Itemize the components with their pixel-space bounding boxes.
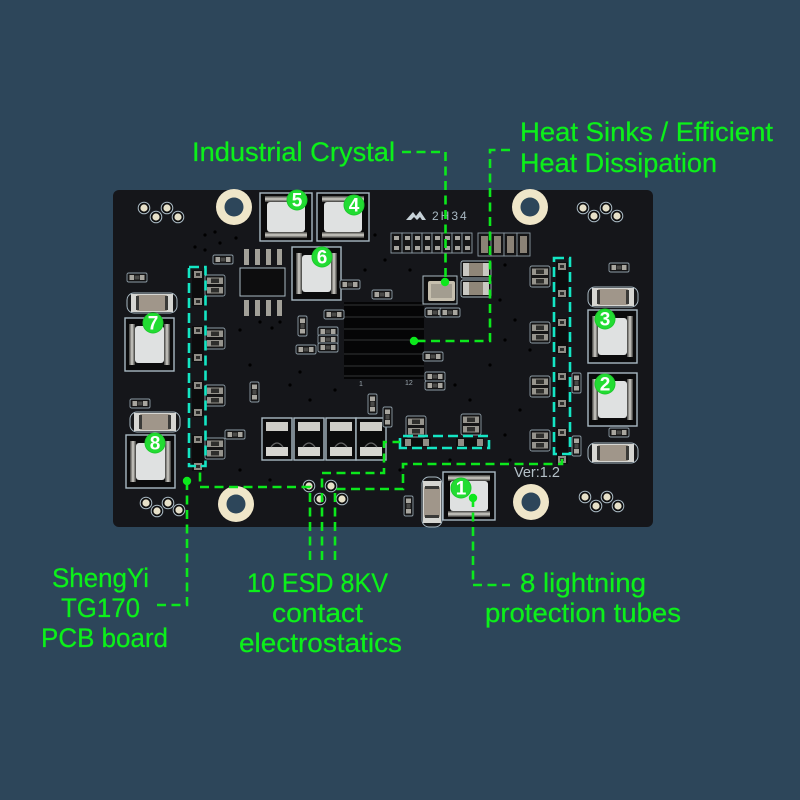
- number badge 5: [287, 190, 307, 212]
- label: ESD: 10 ESD 8KV: [247, 568, 388, 598]
- TVS diodes (cyan regions): [192, 262, 568, 471]
- label: heat sinks: Heat Dissipation: [520, 148, 717, 178]
- label: heat sinks: [520, 117, 774, 178]
- cyan highlight: right TVS group: [554, 258, 570, 454]
- number badge 2: [595, 374, 615, 396]
- heat sink pin numbers: 1: [359, 381, 363, 388]
- mounting holes: [216, 189, 549, 522]
- cyan highlight: left TVS group: [189, 267, 206, 466]
- label: heat sinks: Heat Sinks / Efficient: [520, 117, 774, 147]
- number badge 1: 1: [456, 478, 467, 500]
- PCB board: [113, 189, 653, 527]
- number badge 7: 7: [148, 314, 158, 334]
- label: ESD: [239, 568, 402, 658]
- corner pads: [138, 202, 624, 517]
- leader: ESD left branch: [200, 467, 310, 560]
- heat sink: [344, 302, 424, 379]
- leader: ESD right branch: [335, 455, 562, 560]
- number badge 5: 5: [292, 190, 303, 212]
- IC chip: [240, 249, 285, 316]
- label: PCB board: [41, 563, 168, 653]
- number badge 7: [143, 313, 163, 334]
- industrial crystal: [423, 276, 457, 304]
- number badge 8: [145, 433, 165, 454]
- label: PCB board: PCB board: [41, 623, 168, 653]
- label: PCB board: TG170: [61, 593, 140, 623]
- header pads: [391, 233, 530, 256]
- label: lightning tubes: [485, 568, 681, 628]
- lightning protection tubes: [125, 193, 637, 520]
- right capacitors: [461, 261, 491, 297]
- leader: ESD middle branch: [322, 442, 400, 560]
- number badge 6: [312, 247, 332, 268]
- leader: lightning tubes: [469, 494, 510, 585]
- leader: industrial crystal: [402, 152, 449, 286]
- number badge 3: 3: [600, 310, 610, 330]
- label: ESD: contact: [272, 598, 364, 628]
- label: lightning tubes: 8 lightning: [520, 568, 646, 598]
- logo and date code: 2H34: [432, 209, 469, 223]
- number badge 3: [595, 309, 615, 330]
- label: industrial crystal: Industrial Crystal: [192, 137, 395, 167]
- heat sink pin numbers: [359, 380, 413, 388]
- number badge 4: 4: [349, 196, 360, 216]
- leader: PCB board: [152, 477, 191, 605]
- via holes: [193, 230, 532, 482]
- large MOSFET pads: [262, 418, 386, 460]
- logo and date code: [406, 209, 469, 223]
- leader: heat sinks: [410, 150, 510, 345]
- label: lightning tubes: protection tubes: [485, 598, 681, 628]
- label: ESD: electrostatics: [239, 628, 402, 658]
- number badge 6: 6: [317, 248, 327, 268]
- number badge 8: 8: [150, 434, 160, 454]
- small SMD components: [127, 255, 629, 516]
- cyan highlight: bottom TVS group: [400, 436, 489, 448]
- heat sink pin numbers: 12: [405, 380, 413, 387]
- capacitors: [127, 287, 638, 527]
- version label: Ver:1.2: [514, 465, 560, 481]
- ESD test pads: [303, 480, 348, 505]
- number badge 1: [451, 478, 471, 500]
- label: PCB board: ShengYi: [52, 563, 149, 593]
- number badge 4: [344, 195, 364, 216]
- number badge 2: 2: [600, 374, 610, 396]
